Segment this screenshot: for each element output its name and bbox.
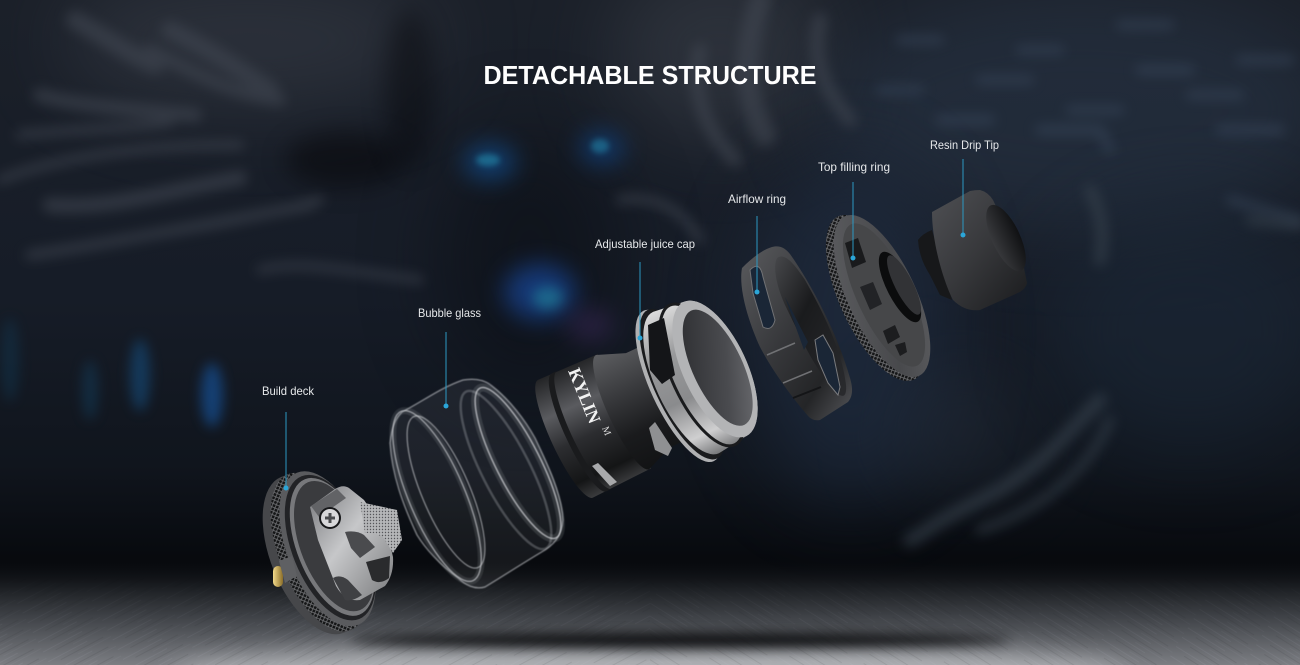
part: bubble glass xyxy=(375,378,576,592)
centre hole xyxy=(871,246,929,328)
side latch xyxy=(649,422,672,456)
ring opening xyxy=(775,257,846,396)
label: Adjustable juice cap xyxy=(595,237,695,340)
airflow slot lower xyxy=(815,335,840,395)
mesh coil xyxy=(360,502,402,553)
label: Bubble glass xyxy=(418,306,481,408)
label: Resin Drip Tip xyxy=(930,138,999,238)
part: resin drip tip xyxy=(918,190,1034,310)
part: airflow ring xyxy=(741,246,852,420)
part: adjustable juice cap xyxy=(518,280,779,520)
part: top filling ring xyxy=(805,201,950,395)
title: DETACHABLE STRUCTURE xyxy=(484,60,816,90)
label: Top filling ring: Top filling ring xyxy=(818,160,890,174)
label: Adjustable juice cap: Adjustable juice cap xyxy=(595,237,695,251)
fill window slot xyxy=(648,318,675,384)
label: Resin Drip Tip: Resin Drip Tip xyxy=(930,138,999,152)
hub notches xyxy=(845,238,866,268)
label: Build deck: Build deck xyxy=(262,384,315,398)
label: Build deck xyxy=(262,384,315,490)
gold contact pin xyxy=(273,566,283,587)
screw xyxy=(319,507,341,529)
brand text: KYLIN xyxy=(564,365,605,426)
label: Airflow ring xyxy=(728,192,786,294)
floor with brushed streaks and shadow xyxy=(0,574,1300,665)
label: Airflow ring: Airflow ring xyxy=(728,192,786,206)
label: Bubble glass: Bubble glass xyxy=(418,306,481,320)
vent slot xyxy=(592,463,617,486)
label: Top filling ring xyxy=(818,160,890,260)
airflow slot upper xyxy=(750,266,775,328)
trademark mark: M xyxy=(599,425,613,437)
part: build deck xyxy=(242,456,402,648)
